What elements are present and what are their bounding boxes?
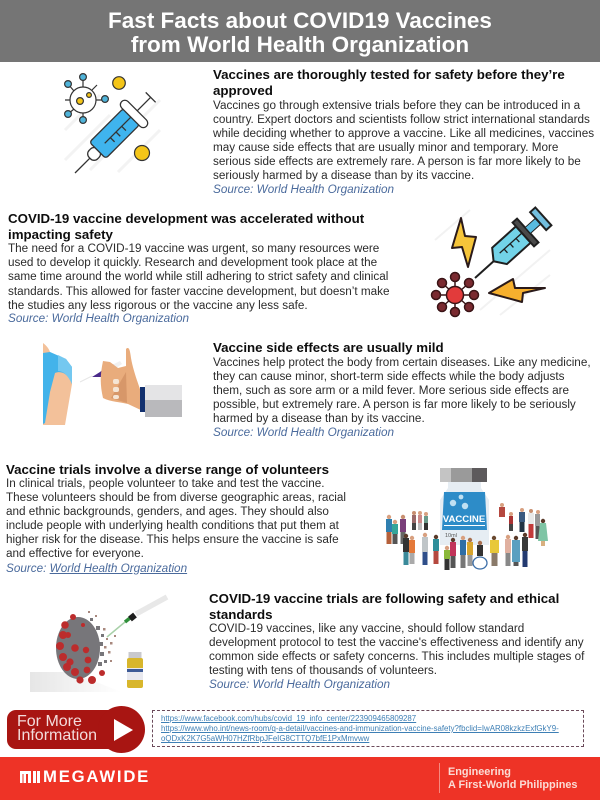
body text: same time around the world while still adhering to strict safety and clinical <box>8 270 388 283</box>
body text: testing with tens of thousands of volunteers. <box>209 664 437 677</box>
body text <box>6 477 346 560</box>
button: for more information: Information <box>17 727 97 744</box>
logo: Megawide: MEGAWIDE <box>43 767 150 786</box>
body text: serious side effects are extremely rare. A person is far more likely to be <box>213 155 581 168</box>
tagline: A First-World Philippines <box>448 778 577 790</box>
links box: https://www.who.int/news-room/q-a-detail/vaccines-and-immunization-vaccine-safety?fbclid=IwAR08kzkzExfGkY9- <box>161 724 559 733</box>
body text: These volunteers should be from diverse geographic areas, racial <box>6 491 346 504</box>
body text: and ethnic backgrounds, genders, and ages. They should also <box>6 505 329 518</box>
heading <box>209 591 559 622</box>
heading: Vaccine side effects are usually mild <box>213 340 444 355</box>
people <box>386 503 548 570</box>
body text: used to develop it quickly. Research and development took place at the <box>8 256 377 269</box>
body text: may cause side effects that are usually minor and temporary. More <box>213 141 558 154</box>
section: accelerated development <box>8 211 390 325</box>
body text: The need for a COVID-19 vaccine was urgent, so many resources were <box>8 242 379 255</box>
footer band <box>0 757 600 800</box>
icon: syringe, virus and lightning bolts <box>430 206 553 318</box>
title banner: Fast Facts about COVID19 Vaccines <box>108 8 492 33</box>
body text: and effective for everyone. <box>6 547 144 560</box>
body text: Vaccines go through extensive trials before they can be introduced in a <box>213 99 580 112</box>
section: diverse volunteers <box>6 462 346 575</box>
heading <box>213 67 565 98</box>
title banner <box>0 0 600 62</box>
title banner: from World Health Organization <box>131 32 469 57</box>
links box <box>152 710 584 747</box>
source: Source: World Health Organization <box>8 312 189 325</box>
source: Source: World Health Organization <box>213 183 394 196</box>
body text: seriously harmed by a disease than by its vaccine. <box>213 169 474 182</box>
source: Source: World Health Organization <box>209 678 390 691</box>
body text <box>213 356 591 425</box>
icon: vaccine vial and crowd of people <box>386 468 548 570</box>
heading: standards <box>209 607 273 622</box>
body text: while deciding whether to approve a vaccine. Like all medicines, vaccines <box>213 127 594 140</box>
body text: them, such as sore arm or a mild fever. More serious side effects are <box>213 384 569 397</box>
body text: standards. This allowed for faster vaccine development, but doesn’t make <box>8 285 390 298</box>
tagline <box>448 766 577 790</box>
body text: the studies any less rigorous or the vaccine any less safe. <box>8 299 308 312</box>
source: Source: World Health Organization <box>213 426 394 439</box>
body text: harmed by a disease than by its vaccine. <box>213 412 425 425</box>
links box: https://www.facebook.com/hubs/covid_19_info_center/223909465809287 <box>161 714 416 723</box>
body text: include people with underlying health conditions that put them at <box>6 519 339 532</box>
button: for more information <box>7 706 145 753</box>
icon: virus dissolving with syringe and vial <box>30 594 168 692</box>
vial <box>440 468 489 545</box>
heading: Vaccine trials involve a diverse range of volunteers <box>6 462 329 477</box>
body text: COVID-19 vaccines, like any vaccine, should follow standard <box>209 622 524 635</box>
icon: syringe and virus <box>64 73 160 174</box>
section: safety and ethical standards <box>209 591 584 691</box>
heading: impacting safety <box>8 227 113 242</box>
heading: COVID-19 vaccine development was accelerated without <box>8 211 364 226</box>
body text: Vaccines help protect the body from certain diseases. Like any medicine, <box>213 356 591 369</box>
vial: 10ml <box>445 533 457 539</box>
body text <box>213 99 594 182</box>
heading: COVID-19 vaccine trials are following safety and ethical <box>209 591 559 606</box>
body text: possible, but extremely rare. A person is far more likely to be seriously <box>213 398 576 411</box>
source: Source: World Health Organization <box>6 562 187 575</box>
tagline: Engineering <box>448 766 511 778</box>
section: side effects <box>213 340 591 439</box>
section: thoroughly tested <box>213 67 594 196</box>
body text <box>8 242 390 312</box>
heading: approved <box>213 83 273 98</box>
links box: oQDxK2K7G5aWH07HZfRbpJFeIG8CTTQ7bfE1PxMmvww <box>161 734 369 743</box>
body text: common side effects or safety concerns. This includes multiple stages of <box>209 650 584 663</box>
body text: higher risk for the disease. This helps ensure the vaccine is safe <box>6 533 339 546</box>
heading <box>8 211 364 242</box>
vial: VACCINE <box>443 514 486 525</box>
icon: arm receiving injection <box>43 343 182 425</box>
body text: they can cause minor, short-term side effects while the body adjusts <box>213 370 565 383</box>
body text: country. Expert doctors and scientists follow strict international standards <box>213 113 590 126</box>
body text: In clinical trials, people volunteer to take and test the vaccine. <box>6 477 325 490</box>
body text <box>209 622 584 677</box>
heading: Vaccines are thoroughly tested for safety before they’re <box>213 67 565 82</box>
button: for more information: For More <box>17 713 82 730</box>
body text: development protocol to test the vaccine's effectiveness and identify any <box>209 636 584 649</box>
